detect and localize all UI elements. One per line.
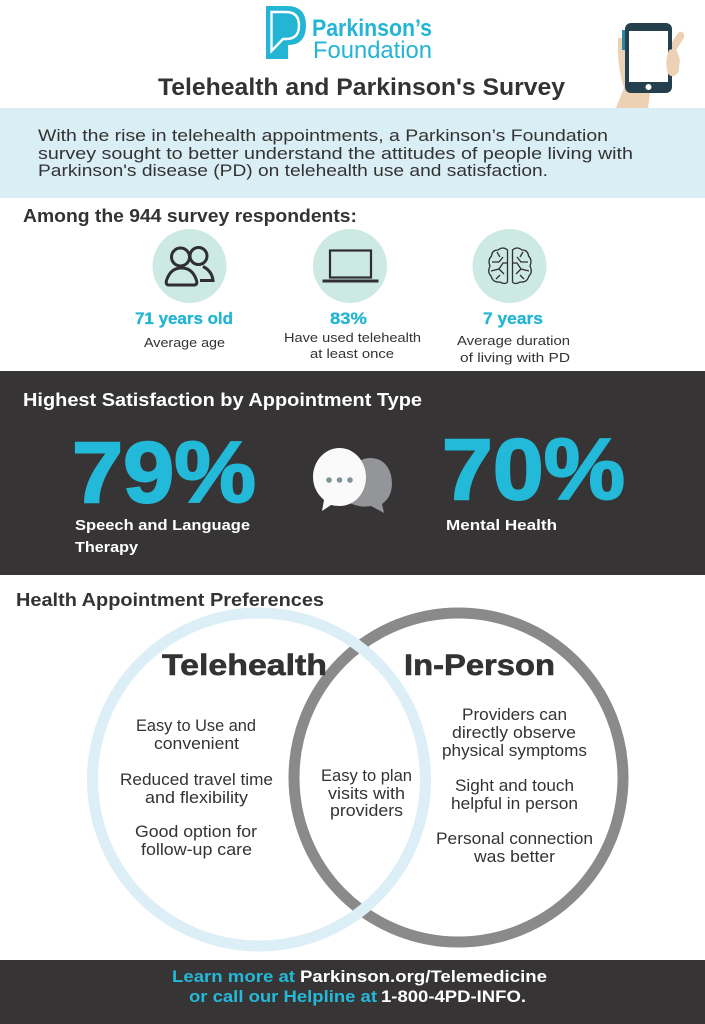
intro text: Parkinson's disease (PD) on telehealth use and satisfaction. — [38, 161, 548, 180]
stat: duration with PD — [457, 229, 570, 365]
footer text: 1-800-4PD-INFO. — [381, 988, 526, 1006]
stat value: 83% — [330, 309, 367, 328]
in-person list: directly observe — [452, 723, 576, 742]
stat: speech and language: Speech and Language — [75, 517, 250, 534]
in-person list: Sight and touch — [455, 776, 574, 795]
stat caption: Average age — [144, 335, 225, 350]
in-person list: was better — [473, 847, 555, 866]
heading: Highest Satisfaction by Appointment Type — [23, 390, 422, 410]
telehealth list: convenient — [154, 734, 239, 753]
intro text — [38, 126, 633, 180]
stat caption: Have used telehealth — [284, 330, 421, 345]
heading: survey respondents: Among the 944 survey respondents: — [23, 206, 357, 226]
shared list: Easy to plan — [321, 766, 412, 785]
stat caption: at least once — [310, 346, 394, 361]
shared list: visits with — [328, 784, 405, 803]
icon: brain — [472, 229, 546, 303]
in-person list: physical symptoms — [442, 741, 587, 760]
panel: introduction — [0, 108, 705, 198]
icon: people — [152, 229, 226, 303]
in-person list: Personal connection — [436, 829, 593, 848]
stat: average age — [135, 229, 233, 350]
footer text — [172, 968, 547, 1006]
in-person list: helpful in person — [451, 794, 578, 813]
telehealth list: follow-up care — [141, 840, 252, 859]
telehealth list: Good option for — [135, 822, 257, 841]
icon: P speech bubble mark — [266, 6, 306, 59]
heading: in-person: In-Person — [404, 649, 555, 682]
stat: mental health: 70% — [442, 422, 625, 518]
panel: footer call to action — [0, 960, 705, 1024]
stat: speech and language: 79% — [72, 425, 256, 521]
stat caption: of living with PD — [460, 350, 570, 365]
logo: Parkinson's Foundation — [266, 6, 432, 64]
circle: in-person — [294, 613, 623, 942]
telehealth list — [120, 716, 273, 859]
intro text: survey sought to better understand the attitudes of people living with — [38, 144, 633, 163]
footer text: Learn more at — [172, 968, 296, 986]
stat caption: Average duration — [457, 333, 570, 348]
shared list: providers — [330, 801, 403, 820]
heading: appointment preferences: Health Appointment Preferences — [16, 590, 324, 610]
intro text: With the rise in telehealth appointments, a Parkinson’s Foundation — [38, 126, 608, 145]
in-person list: Providers can — [462, 705, 567, 724]
panel: highest satisfaction — [0, 371, 705, 575]
stat value: 71 years old — [135, 309, 233, 328]
stat: mental health: Mental Health — [446, 517, 557, 534]
telehealth list: Easy to Use and — [136, 716, 256, 735]
stat caption — [284, 330, 421, 361]
circle: telehealth — [92, 613, 426, 946]
stat: used telehealth — [284, 229, 421, 361]
stat value: 7 years — [483, 309, 543, 328]
logo wordmark: Foundation — [313, 37, 432, 64]
title: Telehealth and Parkinson's Survey — [158, 74, 566, 101]
venn diagram — [92, 613, 623, 946]
logo wordmark — [312, 15, 432, 64]
shared list — [321, 766, 412, 820]
heading: telehealth: Telehealth — [162, 649, 327, 682]
icon: laptop — [313, 229, 387, 303]
footer text: Parkinson.org/Telemedicine — [300, 968, 547, 986]
icon: speech bubbles — [313, 448, 392, 513]
telehealth list: Reduced travel time — [120, 770, 273, 789]
stat: speech and language — [72, 425, 256, 556]
in-person list — [436, 705, 593, 866]
footer text: or call our Helpline at — [189, 988, 378, 1006]
stat: speech and language: Therapy — [75, 539, 139, 556]
logo wordmark: Parkinson’s — [312, 15, 432, 42]
stat caption — [457, 333, 570, 365]
icon: hand holding phone — [616, 23, 684, 108]
telehealth list: and flexibility — [145, 788, 249, 807]
